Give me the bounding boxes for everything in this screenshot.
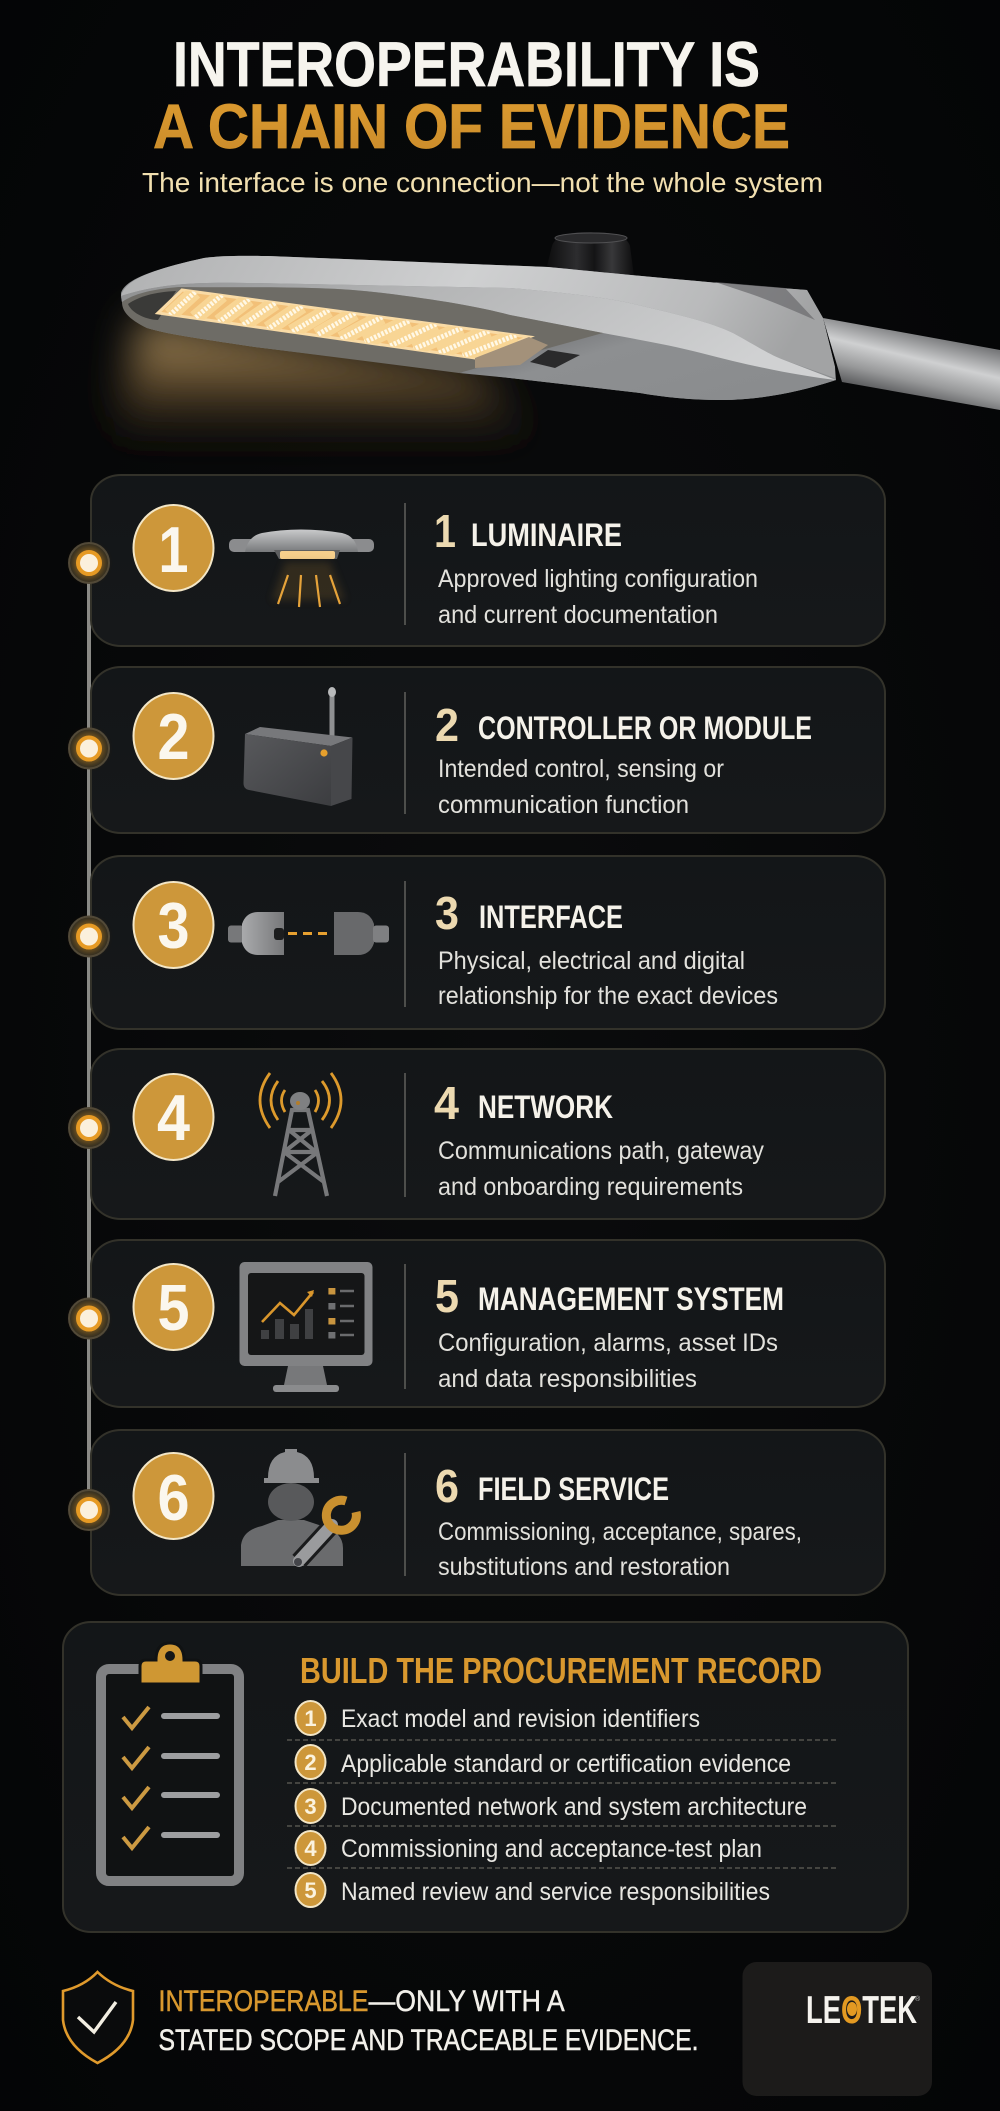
checklist [296,1701,807,1907]
description [438,1137,764,1201]
checklist: 3 [304,1794,317,1819]
panel: network [91,1049,885,1219]
sensor cap [546,232,634,279]
description: and current documentation [438,601,718,629]
housing [121,256,836,400]
panel: luminaire [91,475,885,646]
description: Intended control, sensing or [438,755,724,783]
description [438,755,724,819]
subtitle: The interface is one connection—not the whole system [142,167,823,198]
number badge 4 [134,1074,214,1160]
heading [434,505,622,557]
number badge 6 [134,1453,214,1539]
panel: interface [91,856,885,1029]
description: and data responsibilities [438,1365,697,1393]
checklist: 1 [304,1706,317,1731]
number badge 2 [134,693,214,779]
hero luminaire illustration [110,232,1000,458]
description: Physical, electrical and digital [438,947,745,975]
logo card [742,1962,932,2096]
checklist: Documented network and system architecture [341,1793,807,1821]
heading [435,699,812,751]
timeline line [87,563,91,1510]
description: Communications path, gateway [438,1137,764,1165]
pole arm [823,318,1000,410]
icon: shield check [63,1972,133,2063]
number badge 4: 4 [157,1081,190,1154]
icon: mini luminaire [229,530,374,607]
checklist: 2 [304,1750,317,1775]
panel: management system [91,1240,885,1407]
description: Configuration, alarms, asset IDs [438,1329,778,1357]
checklist: Applicable standard or certification evidence [341,1750,791,1778]
checklist: 4 [304,1836,317,1861]
title [153,30,790,162]
title: A CHAIN OF EVIDENCE [153,92,790,162]
heading: 4 [434,1077,459,1129]
description: communication function [438,791,689,819]
panel: build the procurement record [63,1622,908,1932]
heading: INTERFACE [479,899,623,935]
description [438,565,758,629]
icon: connector pair [228,912,389,955]
description [438,1329,778,1393]
title: INTEROPERABILITY IS [173,30,760,100]
heading: BUILD THE PROCUREMENT RECORD [300,1650,822,1691]
closing statement: STATED SCOPE AND TRACEABLE EVIDENCE. [158,2024,698,2057]
description: and onboarding requirements [438,1173,743,1201]
number badge 1 [134,505,214,591]
icon: controller box [244,687,352,806]
heading: 6 [435,1460,459,1512]
light glow [110,318,540,458]
closing statement [158,1985,698,2057]
description [438,947,778,1010]
panel: field service [91,1430,885,1595]
icon: monitor dashboard [240,1262,372,1392]
heading: NETWORK [478,1089,613,1125]
number badge 5: 5 [158,1271,190,1344]
number badge 6: 6 [158,1461,190,1534]
heading [435,1460,669,1512]
closing statement: —ONLY WITH A [369,1985,565,2018]
description: Commissioning, acceptance, spares, [438,1518,802,1546]
heading: CONTROLLER OR MODULE [478,710,812,746]
heading: 5 [435,1270,459,1322]
panel: controller or module [91,667,885,833]
number badge 3: 3 [158,889,190,962]
heading: 1 [434,505,456,557]
lens opening [122,287,603,373]
number badge 3 [134,882,214,968]
logo card: LEOTEK [806,1989,917,2032]
timeline nodes [69,543,109,1530]
heading [434,1077,613,1129]
description: substitutions and restoration [438,1553,730,1581]
heading: 2 [435,699,459,751]
LED array [158,290,529,358]
number badge 1: 1 [158,513,188,586]
description [438,1518,802,1581]
checklist: Commissioning and acceptance-test plan [341,1835,762,1863]
description: relationship for the exact devices [438,982,778,1010]
heading: 3 [435,887,459,939]
number badge 2: 2 [158,700,190,773]
checklist: Named review and service responsibilities [341,1878,770,1906]
icon: radio tower [260,1073,341,1196]
description: Approved lighting configuration [438,565,758,593]
logo card: ® [915,1995,921,2003]
heading: MANAGEMENT SYSTEM [478,1281,784,1317]
heading: FIELD SERVICE [478,1471,669,1507]
icon: clipboard checklist [101,1643,239,1881]
number badge 5 [134,1264,214,1350]
icon: field technician [241,1449,356,1566]
checklist: 5 [304,1878,317,1903]
closing statement: INTEROPERABLE [158,1985,368,2018]
heading [435,887,623,939]
heading [435,1270,784,1322]
heading: LUMINAIRE [471,517,622,553]
checklist: Exact model and revision identifiers [341,1705,700,1733]
